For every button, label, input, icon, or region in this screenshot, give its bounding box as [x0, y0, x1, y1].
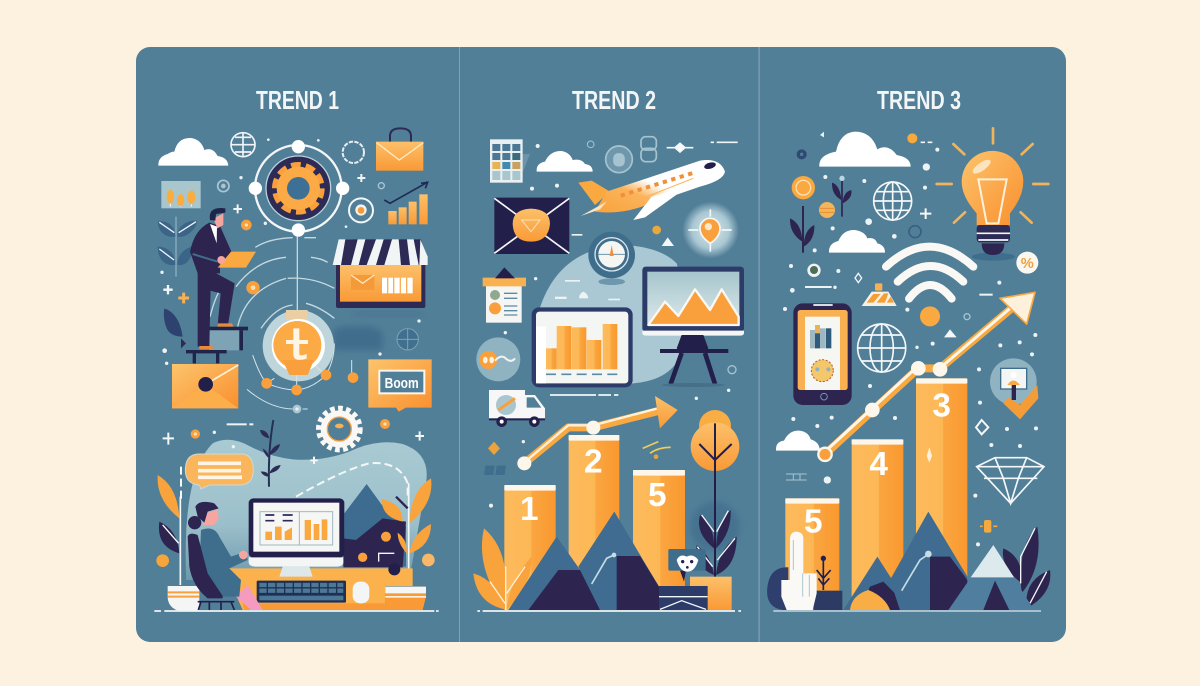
icon: sparkles	[163, 285, 173, 294]
illustration: navy leaves right	[1003, 527, 1050, 608]
bar 3: 3	[932, 388, 951, 425]
dots and sparkles	[162, 348, 382, 448]
icon: coins	[792, 176, 835, 218]
icon: lined mark	[786, 474, 807, 480]
icon: small cloud	[829, 230, 885, 253]
icon: dark ring	[909, 226, 921, 238]
icon: navy plants	[790, 176, 851, 253]
bar 2	[569, 435, 619, 610]
bar 4: 4	[869, 446, 888, 483]
panel: trend 3 upper illustrations	[783, 128, 1048, 405]
decorative marks	[550, 392, 618, 398]
icon: white gear	[319, 408, 360, 450]
icon: dark envelope	[494, 198, 569, 254]
rising arrow	[818, 292, 1035, 461]
dots	[791, 352, 1038, 546]
title: trend 2: TREND 2	[572, 85, 656, 115]
icon: light bulb	[937, 128, 1048, 261]
icon: plus	[920, 208, 931, 219]
icon: faint globe	[397, 329, 418, 350]
icon: delivery truck	[489, 390, 545, 427]
icon: small marks	[797, 132, 932, 159]
icon: orange dot and marks	[920, 306, 970, 337]
illustration: light hill	[186, 440, 427, 580]
dots	[783, 148, 1037, 349]
icon: percent badge: %	[1021, 256, 1034, 272]
icon: check badge	[990, 358, 1038, 419]
icon: smartphone	[793, 303, 852, 405]
bar 3	[633, 470, 685, 610]
bar 3: 5	[648, 477, 667, 514]
icon: tablet bar chart	[532, 307, 633, 387]
icon: orange dot and triangle	[652, 226, 674, 246]
main panel	[136, 47, 1066, 642]
icon: small rings and sparks	[160, 138, 421, 323]
icon: big cloud	[819, 132, 911, 167]
icon: dark leaf	[164, 308, 186, 348]
ground line	[477, 608, 741, 613]
icon: wifi signal	[886, 247, 973, 299]
illustration: mountains	[508, 512, 659, 610]
bar 2: 2	[584, 444, 603, 481]
icon: sparkles	[163, 431, 424, 464]
icon: landscape monitor	[642, 267, 744, 350]
icon: small diamond	[855, 273, 862, 283]
icon: location target with glow	[682, 202, 739, 258]
illustration: mottled shadow	[333, 326, 383, 350]
icon: envelope with seal	[172, 364, 238, 408]
icon: light bulb badge	[263, 310, 334, 381]
icon: wire globe lower	[858, 324, 906, 372]
icon: orange dots	[191, 419, 390, 439]
icon: cloud	[158, 138, 228, 166]
icon: picture of tulips	[161, 181, 201, 208]
icon: gold pile	[862, 283, 897, 306]
icon: boom speech box: Boom	[385, 376, 419, 392]
icon: diamond dash	[667, 142, 738, 152]
bar 1	[504, 485, 556, 610]
icon: computer monitor with charts	[249, 498, 344, 577]
icon: small face badge	[807, 264, 821, 277]
icon: gem outline	[977, 458, 1044, 503]
icon: pot and box	[659, 577, 732, 610]
connector network with orange nodes	[247, 343, 358, 413]
illustration: left plant	[156, 475, 180, 585]
icon: mouse	[353, 582, 369, 603]
icon: leaf plant	[158, 217, 197, 277]
title: trend 1: TREND 1	[256, 85, 339, 115]
icon: sparkle and squares	[484, 442, 671, 475]
icon: orange dots	[241, 220, 260, 294]
small marks on hill	[555, 280, 620, 300]
bar 4	[852, 439, 903, 610]
icon: percent badge	[1016, 252, 1038, 274]
title: trend 3: TREND 3	[877, 85, 961, 115]
icon: easel table	[660, 335, 728, 387]
bar 5: 5	[804, 504, 823, 541]
icon: chat bubble	[185, 454, 253, 489]
icon: gear hub	[249, 140, 349, 237]
bar 1: 1	[520, 491, 539, 528]
icon: branch	[260, 420, 281, 487]
illustration: mountain	[343, 484, 406, 567]
panel: trend 1 upper illustrations	[158, 128, 428, 350]
icon: cloud	[537, 151, 593, 172]
illustration: left leaves	[473, 528, 532, 610]
bar 3	[916, 378, 967, 610]
illustration: woman at desk	[188, 502, 263, 610]
panel: trend 1 lower illustrations	[154, 310, 439, 611]
panel: trend 3 lower illustrations	[767, 292, 1050, 611]
icon: flower badge	[349, 198, 373, 222]
icon: wire globe	[874, 182, 912, 220]
icon: keyboard	[257, 581, 346, 603]
icon: gauge	[588, 232, 635, 285]
arrow	[517, 396, 678, 470]
panel: trend 2 upper illustrations	[483, 137, 744, 383]
icon: boom speech box	[368, 359, 432, 412]
icon: stool legs	[186, 350, 227, 363]
connector arcs	[210, 235, 334, 328]
icon: sparkle diamond	[976, 420, 988, 434]
ground line	[154, 608, 439, 613]
icon: clipboard	[483, 267, 526, 323]
icon: envelope with handle	[376, 128, 423, 171]
icon: round badge	[476, 337, 520, 381]
bar 5	[785, 498, 839, 610]
icon: rising bar chart	[384, 182, 428, 224]
icon: airplane	[578, 160, 725, 220]
illustration: right plant	[382, 478, 435, 585]
icons: small badges	[587, 137, 656, 173]
icon: globe	[231, 133, 255, 157]
illustration: tree	[690, 410, 740, 610]
icon: cloud small	[776, 431, 820, 451]
panel: trend 2 lower illustrations	[473, 307, 741, 611]
icon: mask speech badge	[668, 549, 706, 582]
illustration: desk	[224, 568, 413, 610]
illustration: light hill	[537, 245, 690, 383]
illustration: man on stool with laptop	[190, 208, 256, 350]
icon: dotted ring	[343, 142, 364, 163]
dots	[504, 144, 582, 334]
icon: dashed route	[181, 463, 408, 500]
icon: pots	[168, 563, 426, 611]
illustration: mountains	[843, 512, 1034, 610]
ground line	[773, 609, 1041, 613]
icon: calendar grid	[490, 139, 530, 183]
illustration: hand, plant and blob	[767, 532, 842, 610]
icon: storefront	[333, 239, 428, 308]
icon: small orange gem	[980, 520, 997, 533]
